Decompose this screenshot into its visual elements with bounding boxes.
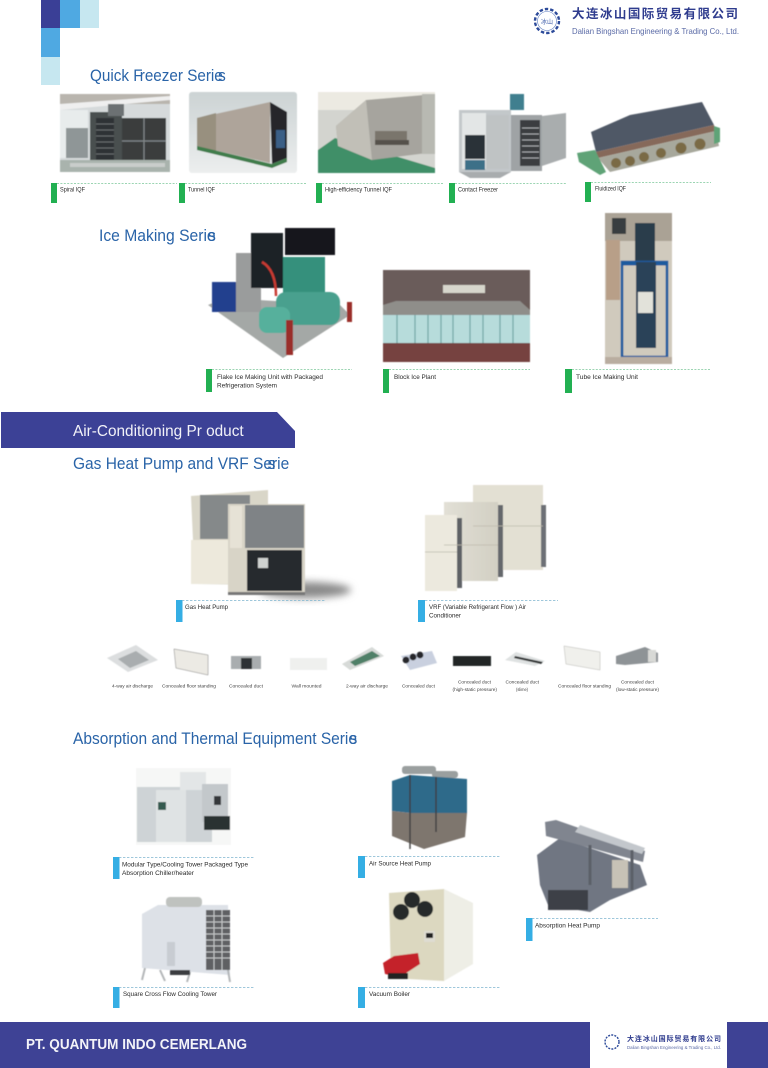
heading: Absorption and Thermal Equipment Series: Absorption and Thermal Equipment Series <box>73 731 357 748</box>
icon: gear emblem: 冰山 <box>541 18 553 26</box>
photo: gas heat pump <box>191 490 351 598</box>
caption <box>217 375 323 390</box>
footer <box>0 1022 768 1068</box>
caption: Block Ice Plant <box>394 375 436 381</box>
unit: 2-way air discharge <box>342 647 388 690</box>
panel: Tunnel IQF <box>179 92 306 203</box>
panel: Absorption Heat Pump <box>526 820 658 941</box>
header logo: 大连冰山国际贸易有限公司 <box>572 6 738 21</box>
caption: Refrigeration System <box>217 384 277 390</box>
caption: High-efficiency Tunnel IQF <box>325 188 392 194</box>
unit: slime concealed duct: (slime) <box>516 687 528 693</box>
unit: 4-way air discharge <box>107 645 158 690</box>
blue marker <box>358 987 365 1008</box>
caption: Fluidized IQF <box>595 186 626 192</box>
green marker <box>449 183 455 203</box>
photo: absorption heat pump <box>537 820 647 912</box>
photo: block ice plant <box>383 270 530 362</box>
footer logo <box>605 1034 721 1051</box>
unit: high-static concealed duct: Concealed duct <box>458 680 492 686</box>
blue marker <box>358 856 365 878</box>
unit: concealed floor standing <box>162 649 216 690</box>
panel: Spiral IQF <box>51 94 177 203</box>
unit: 2-way air discharge: 2-way air discharge <box>346 684 388 690</box>
unit: low-static concealed duct: (low-static pressure) <box>616 687 659 693</box>
green marker <box>316 183 322 203</box>
panel: Tube Ice Making Unit <box>565 213 711 393</box>
blue marker <box>526 918 532 941</box>
panel: Block Ice Plant <box>383 270 530 393</box>
photo: fluidized freezer <box>577 102 720 175</box>
unit: concealed duct <box>229 656 264 690</box>
unit: concealed duct: Concealed duct <box>229 684 264 690</box>
unit: wall mounted <box>290 658 327 690</box>
photo: VRF units <box>425 485 546 591</box>
caption: Absorption Heat Pump <box>535 924 601 930</box>
footer logo: Dalian Bingshan Engineering & Trading Co., Ltd. <box>627 1045 721 1051</box>
green marker <box>206 369 212 392</box>
green marker <box>383 369 389 393</box>
photo: vacuum boiler <box>383 889 473 981</box>
decorative corner squares <box>41 0 99 85</box>
caption <box>122 862 249 877</box>
unit: 4-way air discharge: 4-way air discharge <box>112 684 153 690</box>
caption: Modular Type/Cooling Tower Packaged Type <box>122 862 249 868</box>
photo: packaged absorption chiller <box>136 768 231 845</box>
unit: slime concealed duct <box>505 652 545 693</box>
unit: wall mounted: Wall mounted <box>292 684 322 690</box>
caption: Tunnel IQF <box>188 188 215 194</box>
panel: Gas Heat Pump <box>176 490 351 622</box>
caption: Gas Heat Pump <box>185 605 229 611</box>
heading: Quick Freezer Series: Quick Freezer Series <box>90 68 226 85</box>
panel: High-efficiency Tunnel IQF <box>316 92 443 203</box>
header logo <box>535 6 739 36</box>
caption: Contact Freezer <box>458 188 498 194</box>
green marker <box>179 183 185 203</box>
blue marker <box>176 600 182 622</box>
unit: slime concealed duct: Concealed duct <box>506 680 540 686</box>
heading: Ice Making Series: Ice Making Series <box>99 227 216 245</box>
caption: Spiral IQF <box>60 188 85 194</box>
icon: gear emblem <box>535 9 559 33</box>
panel: Vacuum Boiler <box>358 889 501 1008</box>
panel: indoor units row <box>107 645 659 693</box>
caption: Air Source Heat Pump <box>369 862 432 868</box>
unit: high-static concealed duct <box>452 656 497 693</box>
panel: Fluidized IQF <box>577 102 720 202</box>
photo: cooling tower <box>142 897 230 982</box>
company name: PT. QUANTUM INDO CEMERLANG <box>26 1037 247 1053</box>
blue marker <box>113 857 120 879</box>
footer logo: 大连冰山国际贸易有限公司 <box>627 1034 721 1043</box>
unit: low-static concealed duct <box>616 647 659 693</box>
caption: VRF (Variable Refrigerant Flow ) Air <box>429 605 526 611</box>
caption: Conditioner <box>429 614 461 620</box>
unit: concealed floor standing right <box>558 646 611 690</box>
caption: Vacuum Boiler <box>369 992 410 998</box>
heading: Gas Heat Pump and VRF Series: Gas Heat Pump and VRF Series <box>73 456 289 473</box>
photo: contact freezer <box>459 94 566 178</box>
panel: Absorption Chiller/heater <box>113 768 255 879</box>
unit: high-static concealed duct: (high-static pressure) <box>452 687 497 693</box>
unit: concealed floor standing right: Concealed floor standing <box>558 684 611 690</box>
caption: Flake Ice Making Unit with Packaged <box>217 375 323 381</box>
panel: Flake Ice Making Unit <box>206 228 352 392</box>
unit: low-static concealed duct: Concealed duct <box>621 680 655 686</box>
caption <box>429 605 526 620</box>
photo: high-efficiency tunnel <box>318 92 435 173</box>
unit: concealed duct with fans: Concealed duct <box>402 684 436 690</box>
unit: concealed floor standing: Concealed floor standing <box>162 684 216 690</box>
photo: tube ice unit <box>605 213 672 364</box>
panel: Air Source Heat Pump <box>358 766 501 878</box>
green marker <box>51 183 57 203</box>
caption: Square Cross Flow Cooling Tower <box>123 992 217 998</box>
caption: Tube Ice Making Unit <box>576 375 638 381</box>
caption: Absorption Chiller/heater <box>122 871 194 877</box>
green marker <box>585 182 591 202</box>
header logo: Dalian Bingshan Engineering & Trading Co., Ltd. <box>572 26 739 36</box>
blue marker <box>418 600 425 622</box>
banner: Air-Conditioning Product: Air-Conditioning Pr oduct <box>73 423 244 440</box>
photo: tunnel freezer <box>189 92 297 173</box>
photo: air source heat pump <box>392 766 467 849</box>
panel: Contact Freezer <box>449 94 566 203</box>
blue marker <box>113 987 120 1008</box>
photo: spiral freezer <box>60 94 170 172</box>
panel: Square Cross Flow Cooling Tower <box>113 897 255 1008</box>
banner: Air-Conditioning Product <box>1 412 295 448</box>
unit: concealed duct with fans <box>401 651 437 690</box>
photo: flake ice unit <box>208 228 352 358</box>
green marker <box>565 369 572 393</box>
panel: VRF Air Conditioner <box>418 485 558 622</box>
